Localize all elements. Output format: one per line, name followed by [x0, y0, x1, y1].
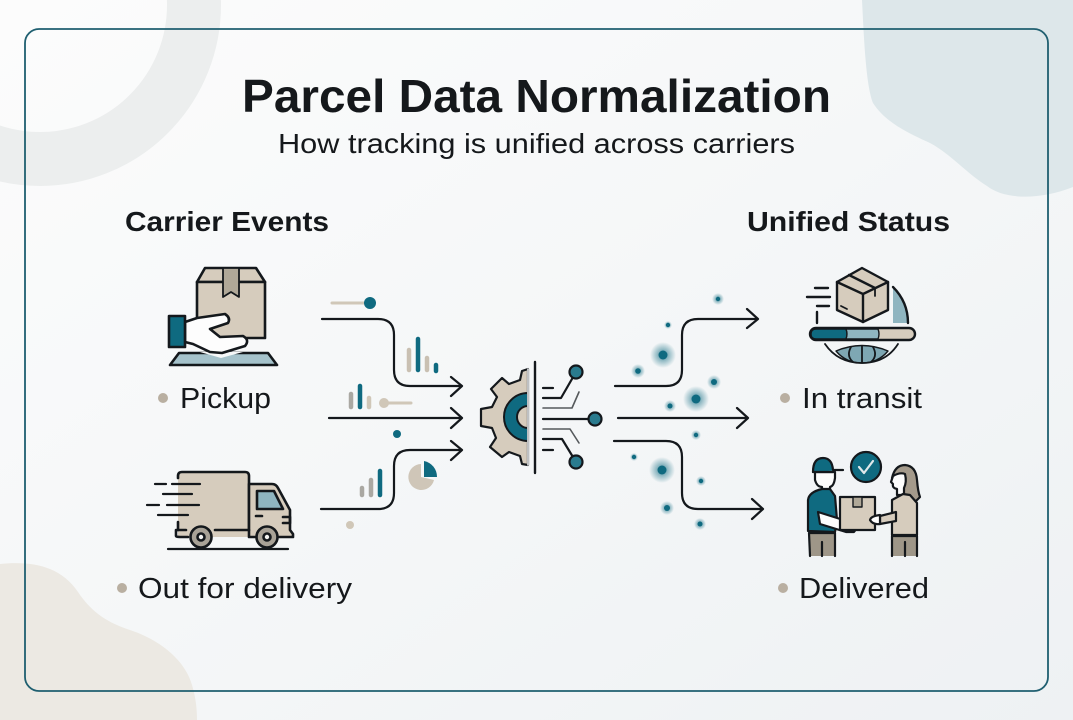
icon: normalization gear and circuit	[481, 362, 602, 473]
label: in transit: In transit	[802, 383, 922, 415]
arrows: carrier events to engine	[321, 319, 462, 509]
heading: unified status: Unified Status	[747, 206, 950, 237]
chart decorations: left data bits	[332, 297, 437, 529]
subtitle: How tracking is unified across carriers	[278, 128, 795, 159]
glowing data particles	[630, 293, 724, 530]
icon: delivery truck	[147, 470, 293, 549]
label: delivered: Delivered	[799, 573, 929, 605]
label: out for delivery: Out for delivery	[138, 573, 353, 605]
arrows: engine to unified status	[614, 309, 763, 519]
title: Parcel Data Normalization	[242, 70, 831, 122]
icon: pickup hand holding parcel	[169, 268, 277, 365]
icon: in transit parcel, progress bar and globe	[807, 268, 915, 363]
label: pickup: Pickup	[180, 383, 271, 415]
icon: courier handing parcel to customer	[808, 452, 920, 556]
heading: carrier events: Carrier Events	[125, 206, 329, 237]
